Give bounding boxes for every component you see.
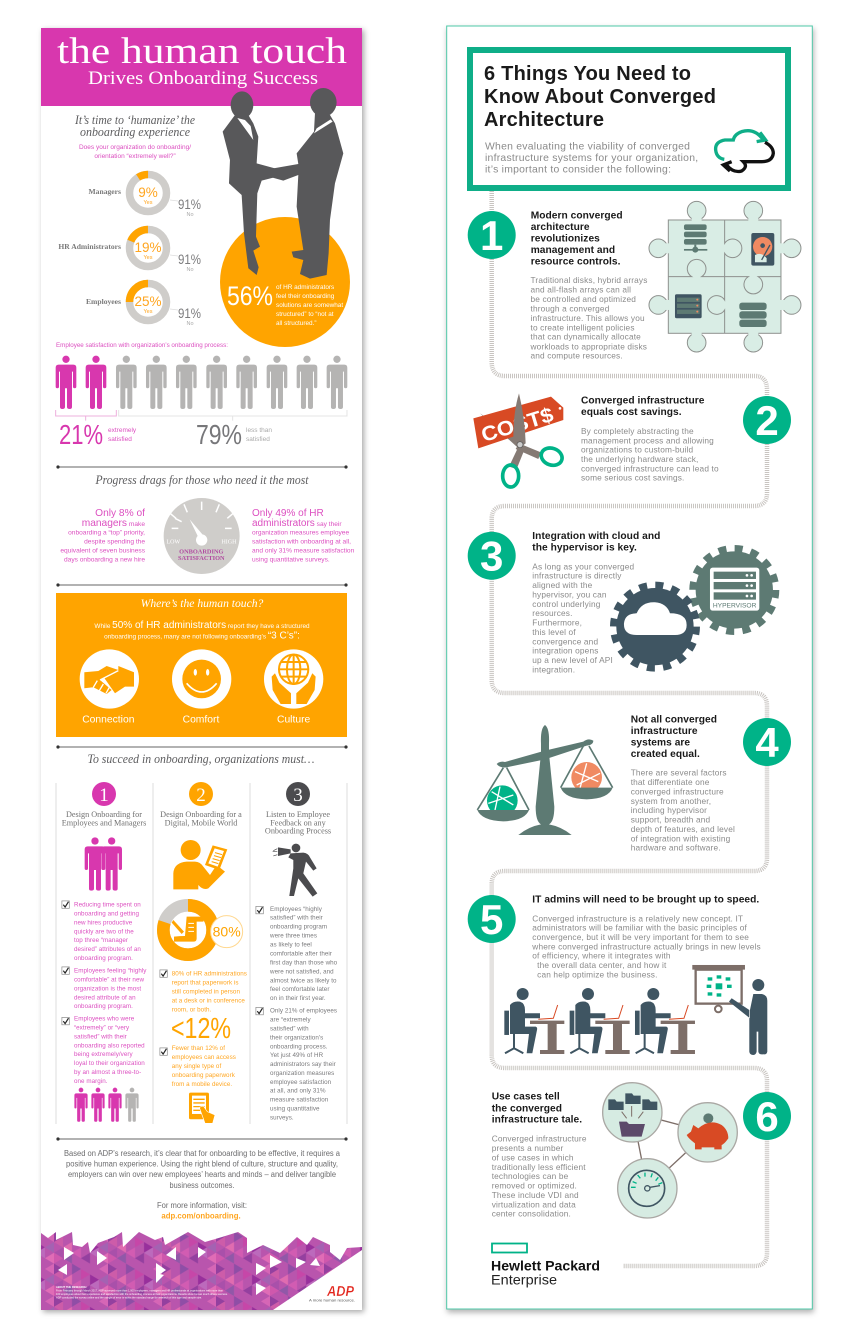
icon: comfort: Comfort [183,714,219,725]
orange circle callout: 56%: 56% [227,281,273,311]
number badge 3: 3 [480,533,503,580]
body 2: converged infrastructure can lead to [581,463,719,473]
checklist: column 1: onboarding program. [74,1003,133,1010]
column 3: listen to employee feedback: 3 [293,785,303,806]
checklist: column 1: desired” attributes of an [74,946,141,953]
column 2: design onboarding for digital mobile world: Digital, Mobile World [165,818,237,828]
icon: man with megaphone [273,844,317,897]
icon: connection [80,649,139,725]
body 4: hardware and software. [631,843,721,853]
column 3: listen to employee feedback: Onboarding Process [265,826,331,836]
section 6 [492,1083,791,1219]
body 4: system from another, [631,796,711,806]
checklist: column 2: <12% [171,1013,231,1045]
checklist: column 3: satisfied” with [270,1025,309,1032]
section heading: humanize: It’s time to ‘humanize’ the [74,113,195,127]
closing paragraph: positive human experience. Using the right blend of culture, structure and quality, [66,1160,338,1168]
text: only 8% of managers: managers make [82,518,145,529]
logo: ADP: A more human resource. [309,1298,355,1302]
body 5: of efficiency, where it integrates with [532,951,671,961]
donut: managers: 9% [138,185,158,200]
link: adp.com/onboarding. [161,1212,241,1220]
donut: HR administrators: Yes [144,255,153,261]
body 1: that can dynamically allocate [530,332,641,342]
icon: cloud cycle [716,131,773,171]
panel: where's the human touch: Where’s the human touch? [141,597,264,610]
number badge 1: 1 [480,212,503,259]
handshake silhouettes [223,88,343,279]
icon: database [739,303,767,327]
icon: person with tablet [173,840,227,889]
logo: ADP: ADP [326,1283,355,1300]
body 5: Converged infrastructure is a relatively new concept. IT [532,913,743,923]
gauge: onboarding satisfaction: LOW [166,539,180,545]
text: only 8% of managers: Only 8% of [95,508,145,519]
intro text: it’s important to consider the following: [485,165,671,176]
donut: managers: 91% [178,196,201,212]
closing paragraph: Based on ADP’s research, it’s clear that for onboarding to be effective, it requires a [64,1149,341,1158]
orange circle callout: 56%: all structured.” [276,320,316,327]
checklist: column 2: any single type of [172,1063,221,1070]
body 6: technologies can be [492,1171,569,1181]
checklist: column 1: onboarding and getting [74,910,140,918]
logo: Hewlett Packard Enterprise [491,1244,600,1287]
body 3: Furthermore, [532,618,582,628]
donut: employees: 25% [134,294,162,309]
heading: to succeed: To succeed in onboarding, organizations must… [88,752,314,766]
donut: HR administrators [58,224,201,273]
gauge: onboarding satisfaction: ONBOARDING [179,548,224,555]
checklist: column 1: one margin. [74,1078,108,1085]
donut: HR administrators: 91% [178,251,201,267]
checklist: column 1: “extremely” or “very [74,1024,130,1032]
text: only 8% of managers: despite spending the [84,538,145,546]
checklist: column 3: first day than those who [270,959,338,966]
checklist: column 1 [62,901,147,1085]
heading 6: infrastructure tale. [492,1115,582,1126]
number badge 4: 4 [755,719,779,766]
checklist: column 3: Only 21% of employees [270,1007,337,1014]
checklist: column 2: still completed in person [172,989,240,996]
donut chart: 80%: 80% [213,924,241,940]
column 3: listen to employee feedback [256,782,338,1122]
checklist: column 2: report that paperwork is [172,980,239,987]
checklist: column 3: almost twice as likely to [270,977,337,984]
body 5: administrators will be familiar with the basic principles of [532,923,748,933]
panel: the human touch infographic [41,28,362,1310]
checklist: column 3: were not satisfied, and [269,968,334,975]
stat: 79% less than satisfied: 79% [196,419,242,450]
intro text: When evaluating the viability of converged [485,141,690,152]
body 3: control underlying [532,599,601,609]
body 4: There are several factors [631,768,727,778]
title: 6 Things You Need to [484,63,691,85]
body 3: resources. [532,608,573,618]
logo: Hewlett Packard Enterprise: Enterprise [491,1271,557,1287]
checklist: column 1: onboarding program. [74,955,133,962]
icon: gears [614,549,776,668]
column 3: listen to employee feedback: Listen to Employee [266,810,330,819]
checklist: column 3: comfortable after their [270,950,332,957]
body 1: workloads to appropriate disks [530,341,647,351]
body 3: integration. [532,664,575,674]
body 6: of use cases in which [492,1152,574,1162]
number badge 4 [743,718,791,766]
checklist: column 1: Employees feeling “highly [74,968,147,974]
checklist: column 1: by an almost a three-to- [74,1069,141,1076]
text: only 8% of managers: equivalent of seven business [60,548,146,554]
icon: use case network [603,1083,737,1218]
title: the human touch [57,31,348,72]
icon: server rack [684,224,707,253]
body 1: and all-flash arrays can all [530,284,631,294]
donut: HR administrators: No [186,267,194,273]
checklist: column 3: Employees “highly [270,906,323,913]
checklist: column 3: feel comfortable later [270,986,329,993]
stat: 21% extremely satisfied: 21% [59,419,103,450]
gauge: onboarding satisfaction: HIGH [221,539,237,545]
panel: where's the human touch: While 50% of HR administrators report they have a structured [94,620,310,631]
pictogram row: satisfaction [56,356,347,421]
stat: 21% extremely satisfied: satisfied [108,436,132,443]
column 3: listen to employee feedback: Feedback on any [270,818,327,828]
icon: hard disk [751,233,774,266]
checklist: column 3 [256,906,338,1122]
donut chart: 80% [163,905,243,955]
checklist: column 1: loyal to their organization [74,1060,145,1067]
checklist: column 3: measure satisfaction [270,1097,329,1104]
panel: converged architecture infographic [447,26,812,1309]
body 6: traditionally less efficient [492,1162,586,1172]
icon: piggy bank [678,1103,737,1162]
checklist: column 3: employee satisfaction [270,1079,332,1086]
body 6: These include VDI and [492,1190,579,1200]
body 3: this level of [532,627,576,637]
icon: document with touch [189,1093,215,1123]
body 6: presents a number [492,1143,564,1153]
donut: managers [89,167,201,219]
body 5: where converged infrastructure actually brings in new levels [531,941,761,951]
logo: ADP [309,1283,355,1302]
checklist: column 1: Employees who were [74,1016,135,1022]
checklist: column 2: employees can access [172,1054,236,1061]
checklist: column 2: room, or both. [172,1006,212,1014]
title: Architecture [484,109,604,131]
orange circle callout: 56%: of HR administrators [276,284,334,291]
body 3: aligned with the [532,580,593,590]
icon: scissors cutting cost tag: COST$ [479,403,557,447]
subtitle: Drives Onboarding Success [88,69,318,89]
gear: hypervisor [693,549,776,631]
footnote: about the research: ABOUT THE RESEARCH [56,1285,87,1289]
checklist: column 3: as likely to feel [270,942,312,949]
number badge 5 [468,895,516,943]
icon: presenter at board [692,965,767,1055]
icon: scissors cutting cost tag [473,393,565,487]
section 3 [468,531,776,674]
panel: where's the human touch [56,593,347,737]
column 2: design onboarding for digital mobile world [160,782,247,1123]
icon: puzzle [649,201,801,352]
logo: Hewlett Packard Enterprise: Hewlett Packard [491,1258,600,1274]
icon: speedometer [618,1159,677,1218]
body 3: convergence and [532,636,598,646]
checklist: column 3: their organization’s [270,1034,323,1041]
checklist: column 2: at a desk or in conference [172,998,245,1005]
heading 4: infrastructure [631,726,698,737]
number badge 3 [468,532,516,580]
header box [470,50,788,188]
icon: three of four people [74,1088,139,1122]
icon: server box [675,294,702,318]
question text: Does your organization do onboarding/ [79,144,191,151]
checklist: column 1: Reducing time spent on [74,902,141,908]
stat: 79% less than satisfied: satisfied [246,436,270,443]
heading 5: IT admins will need to be brought up to speed. [532,894,759,905]
question text: orientation “extremely well?” [94,153,176,160]
section 4 [477,714,791,853]
icon: folders [603,1083,662,1142]
heading 2: equals cost savings. [581,407,682,418]
heading 6: Use cases tell [492,1092,560,1103]
checklist: column 3: on in their first year. [270,995,326,1002]
checklist: column 2 [160,970,247,1088]
body 6: Converged infrastructure [492,1134,587,1144]
gear: cloud [614,585,696,668]
checklist: column 1: onboarding also reported [74,1042,145,1050]
body 5: can help optimize the business. [535,969,658,979]
closing paragraph [64,1149,341,1210]
body 2: management process and allowing [581,435,714,445]
heading 4: Not all converged [631,714,717,725]
donut: managers: Managers [89,187,121,196]
column 1: design onboarding for employees and managers: Design Onboarding for [66,810,142,819]
orange circle callout: 56%: feel their onboarding [276,293,335,300]
intro text: infrastructure systems for your organization, [485,153,698,164]
body 1: to create intelligent policies [530,322,635,332]
donut: employees: No [186,321,194,327]
text: only 8% of managers: days onboarding a new hire [64,556,145,564]
donut: HR administrators: 19% [134,240,162,255]
orange circle callout: 56%: solutions are somewhat [276,302,343,309]
checklist: column 1: organization is the most [74,986,141,992]
body 3: up a new level of API [532,655,613,665]
checklist: column 1: satisfied” with their [74,1034,127,1040]
checklist: column 1: comfortable” at their new [74,976,144,984]
checklist: column 3: satisfied” with their [270,915,323,922]
donut: employees: Yes [144,309,153,315]
heading 6: the converged [492,1103,562,1114]
icon: connection: Connection [82,714,135,725]
title: Know About Converged [484,86,716,108]
text: only 8% of managers: onboarding a “top” priority, [68,530,145,536]
body 4: support, breadth and [631,814,711,824]
column 2: design onboarding for digital mobile world: 2 [196,785,206,806]
number badge 2 [743,396,791,444]
text: only 49% of HR administrators: using quantitative surveys. [252,556,330,564]
body 4: depth of features, and level [631,824,735,834]
body 6: removed or optimized. [492,1180,577,1190]
icon: comfort [172,649,231,725]
body 3: integration opens [532,646,599,656]
heading 1: management and [531,245,615,256]
footnote: about the research: ADP conducted the survey online and the margin of error is within the standard range for research of this type and sample size. [56,1296,202,1300]
checklist: column 1: desired attribute of an [74,994,136,1002]
body 1: Traditional disks, hybrid arrays [530,275,648,285]
body 3: As long as your converged [532,561,635,571]
number badge 6: 6 [755,1093,779,1140]
body 6: virtualization and data [492,1199,576,1209]
checklist: column 3: using quantitative [270,1106,320,1112]
heading: progress drags: Progress drags for those who need it the most [95,473,309,487]
checklist: column 1: top three “manager [74,937,128,944]
body 1: infrastructure. This allows you [530,313,645,323]
section heading: humanize: onboarding experience [80,125,190,139]
section 2 [473,393,791,487]
body 6: center consolidation. [492,1209,571,1219]
text: only 49% of HR administrators: satisfaction with onboarding at all, [252,538,351,546]
heading 1: Modern converged [531,210,623,221]
orange circle callout: 56%: structured” to “not at [276,311,334,318]
checklist: column 3: surveys. [270,1114,294,1122]
checklist: column 3: were three times [269,933,317,940]
section heading: humanize [74,113,195,139]
heading 3: the hypervisor is key. [532,543,637,554]
donut: HR administrators: HR Administrators [58,242,121,251]
body 3: infrastructure is directly [532,571,622,581]
checklist: column 3: onboarding program [270,924,327,931]
body 1: and compute resources. [530,351,623,361]
icon: culture: Culture [277,714,311,725]
checklist: column 3: organization measures [270,1070,334,1077]
closing paragraph: For more information, visit: [157,1201,247,1210]
heading 2: Converged infrastructure [581,395,705,406]
body 1: through a converged [530,303,610,313]
checklist: column 1: being extremely/very [74,1051,133,1058]
section 5 [468,894,767,1055]
donut: employees: 91% [178,305,201,321]
column 2: design onboarding for digital mobile world: Design Onboarding for a [160,810,242,819]
checklist: column 2: from a mobile device. [172,1081,232,1088]
header banner [41,28,362,106]
satisfaction label: Employee satisfaction with organization’s onboarding process: [56,342,228,349]
checklist: column 2: onboarding paperwork [172,1072,236,1079]
checklist: column 1: new hires productive [74,920,133,926]
donut: employees: Employees [86,297,121,306]
heading 1: architecture [531,222,590,233]
number badge 1 [468,211,516,259]
body 2: the underlying hardware stack, [581,454,698,464]
panel: where's the human touch: onboarding process, many are not following onboarding’s “3 C’s”: [104,630,300,642]
closing paragraph: employers can win over new employees’ hearts and minds – and deliver tangible [68,1170,336,1179]
text: only 49% of HR administrators: and only 31% measure satisfaction [252,548,355,554]
stat: 21% extremely satisfied: extremely [108,427,137,434]
icon: balance scale [477,725,613,835]
body 4: converged infrastructure [631,786,724,796]
number badge 5: 5 [480,896,503,943]
heading 1: revolutionizes [531,234,600,245]
text: only 49% of HR administrators: organization measures employee [252,530,349,536]
column 1: design onboarding for employees and managers [62,782,147,1122]
heading 1: resource controls. [531,257,621,268]
column 1: design onboarding for employees and managers: 1 [99,785,109,806]
triangle mosaic footer [41,1232,362,1310]
donut: managers: No [186,212,194,218]
body 5: the overall data center, and how it [535,960,667,970]
checklist: column 1: quickly are two of the [74,928,134,936]
checklist: column 3: are “extremely [270,1016,311,1023]
text: only 49% of HR administrators: Only 49% of HR [252,508,324,519]
text: only 49% of HR administrators: administrators say their [252,518,342,529]
heading 3: Integration with cloud and [532,531,660,542]
gear: hypervisor: HYPERVISOR [713,603,757,610]
number badge 2: 2 [755,397,779,444]
body 2: some serious cost savings. [581,473,685,483]
checklist: column 3: administrators say their [270,1061,336,1068]
body 5: convergence, but it will be very important for them to see [532,932,749,942]
checklist: column 2: Fewer than 12% of [172,1045,225,1052]
column 1: design onboarding for employees and managers: Employees and Managers [62,818,146,828]
donut: employees [86,284,201,327]
body 1: be controlled and optimized [530,294,636,304]
closing paragraph: business outcomes. [170,1181,234,1190]
body 2: organizations to custom-build [581,445,694,455]
stat: 79% less than satisfied: less than [246,427,272,434]
footnote: about the research: 100 employees about their experience and satisfaction with the onboarding process at their organizations. Results show human touch drives success. [56,1292,228,1296]
body 2: By completely abstracting the [581,426,694,436]
footnote: about the research: From February through March 2017, ADP surveyed more than 1,000 employees, managers and HR professionals at organizations with more than [56,1288,224,1292]
icon: two people [85,837,122,891]
gauge: onboarding satisfaction [164,498,240,574]
heading 4: created equal. [631,749,700,760]
heading 4: systems are [631,738,690,749]
icon: culture [264,649,323,725]
donut: managers: Yes [144,200,153,206]
number badge 6 [743,1092,791,1140]
checklist: column 3: onboarding process. [270,1043,328,1050]
checklist: column 3: Yet just 49% of HR [270,1052,324,1059]
body 4: that differentiate one [631,777,710,787]
gauge: onboarding satisfaction: SATISFACTION [178,555,225,562]
body 4: of integration with existing [631,833,731,843]
body 4: including hypervisor [631,805,707,815]
checklist: column 3: at all, and only 31% [270,1088,326,1095]
orange circle callout: 56% [220,217,350,347]
section 1 [468,201,801,361]
body 3: hypervisor, you can [532,589,607,599]
icon: seated workers at laptops [504,988,695,1054]
checklist: column 2: 80% of HR administrations [172,971,247,978]
